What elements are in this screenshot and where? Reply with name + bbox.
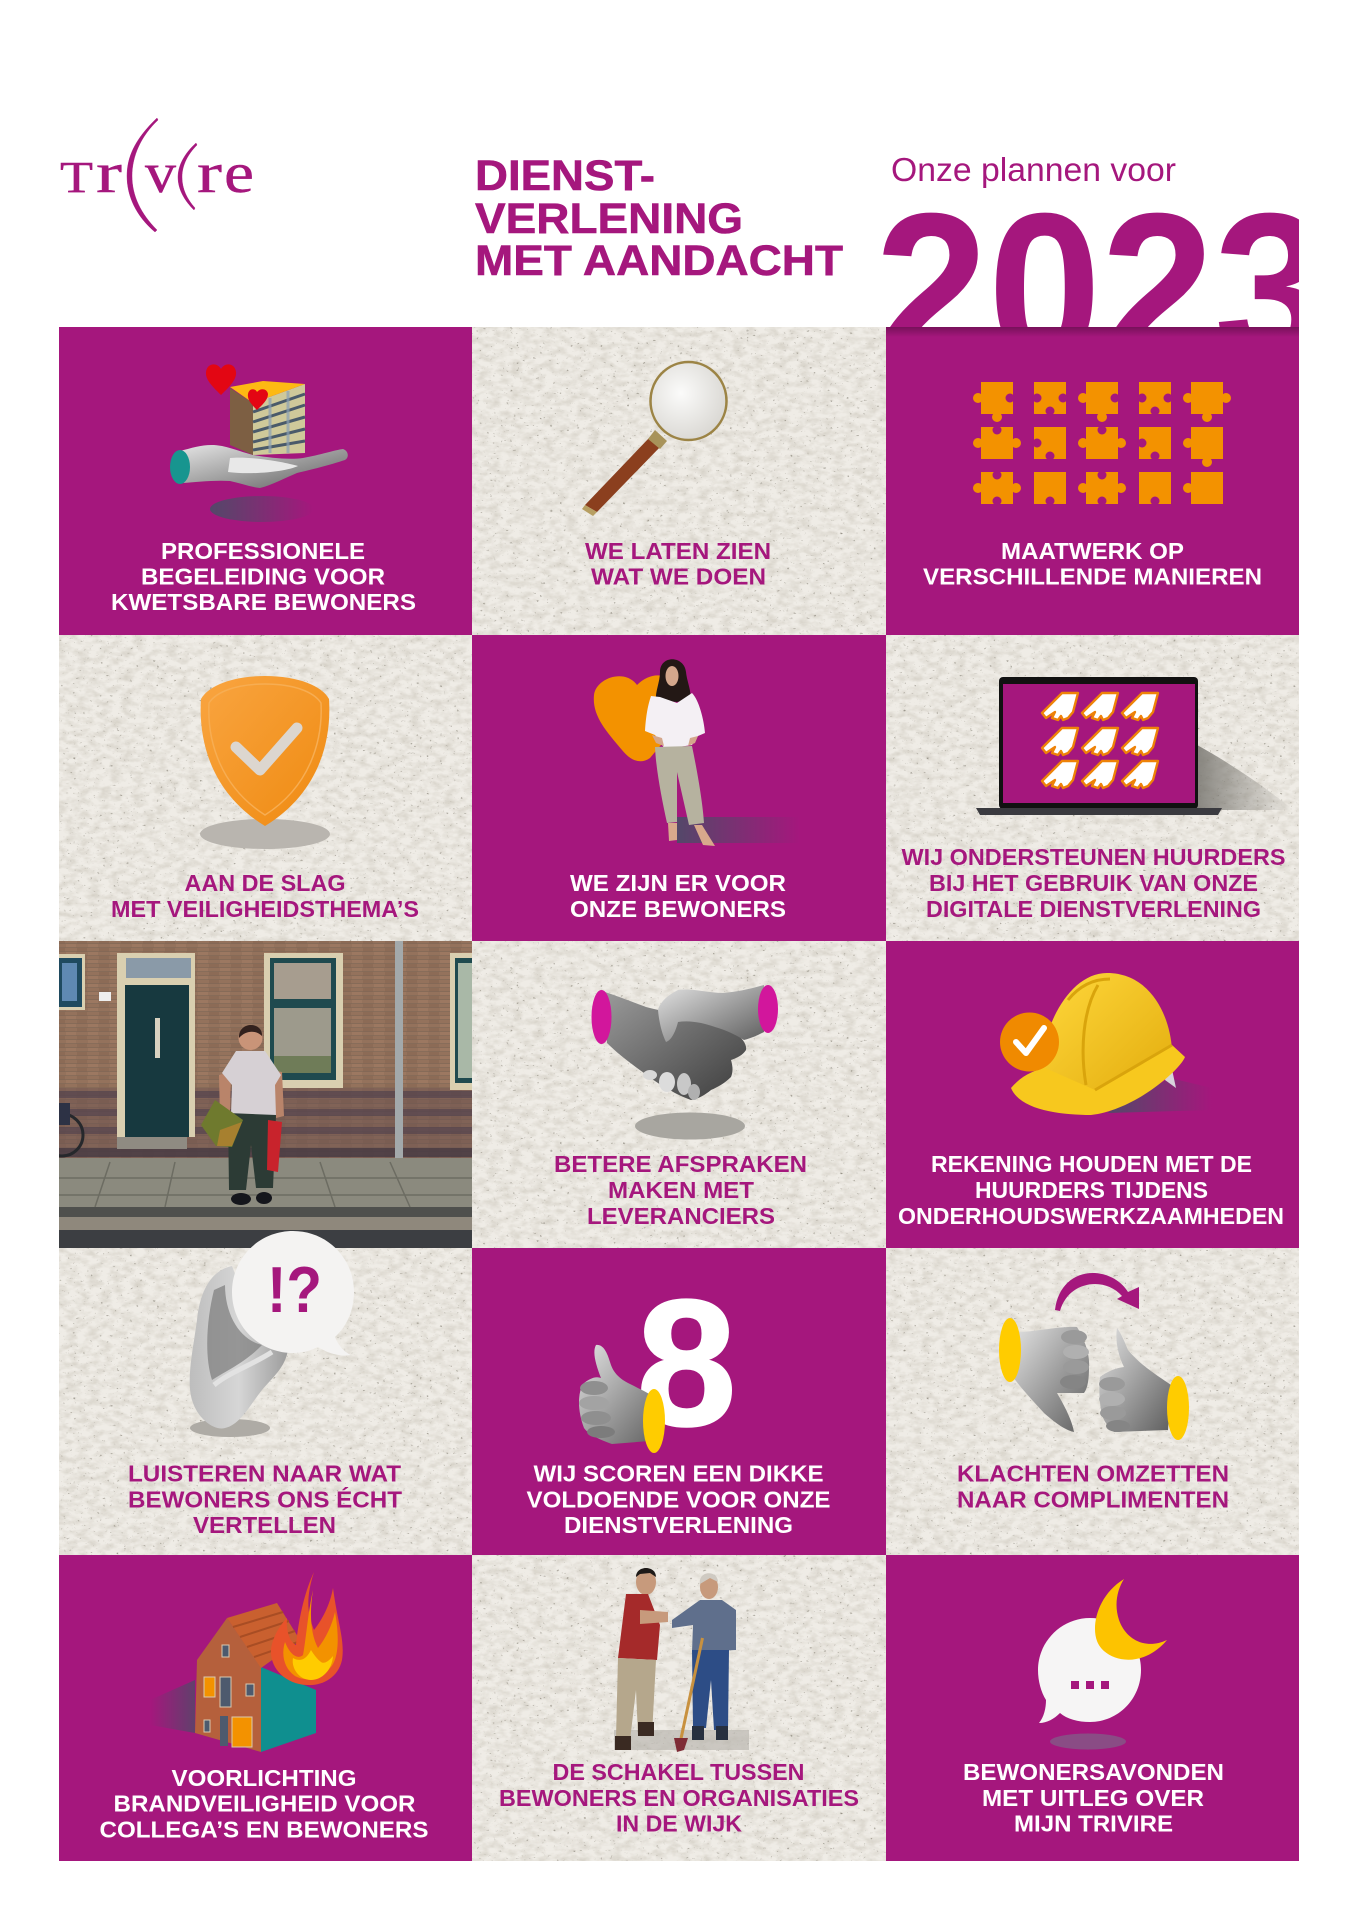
caption: LEVERANCIERS	[587, 1203, 775, 1229]
caption: DIGITALE DIENSTVERLENING	[926, 896, 1261, 922]
icon: woman with orange heart	[594, 659, 800, 846]
icon: speech bubble with moon	[1038, 1579, 1167, 1750]
logo: Trivire: e	[224, 142, 254, 205]
panel: rekening houden met huurders	[886, 941, 1299, 1248]
panel: klachten omzetten	[886, 1248, 1299, 1555]
caption	[923, 538, 1262, 590]
title: Dienstverlening met aandacht	[475, 152, 843, 285]
icon: orange shield with check	[200, 676, 330, 849]
title: Dienstverlening met aandacht: DIENST-	[475, 152, 655, 200]
caption: AAN DE SLAG	[184, 870, 346, 896]
speech bubble	[232, 1231, 354, 1356]
icon: laptop with hand cursors	[976, 677, 1293, 815]
caption: VOLDOENDE VOOR ONZE	[526, 1486, 830, 1512]
caption: PROFESSIONELE	[161, 538, 365, 564]
caption: VOORLICHTING	[172, 1765, 356, 1791]
caption: MET VEILIGHEIDSTHEMA’S	[111, 896, 419, 922]
panel: we zijn er voor onze bewoners	[472, 635, 886, 941]
caption	[554, 1151, 807, 1229]
caption: MAKEN MET	[608, 1177, 754, 1203]
caption: WE ZIJN ER VOOR	[570, 870, 786, 896]
icon: handshake	[592, 985, 778, 1140]
icon: puzzle pieces	[973, 382, 1231, 506]
logo: Trivire	[60, 118, 254, 232]
caption: MAATWERK OP	[1001, 538, 1184, 564]
title: Dienstverlening met aandacht: MET AANDACHT	[475, 237, 843, 285]
caption: BRANDVEILIGHEID VOOR	[114, 1790, 416, 1816]
caption: VERTELLEN	[193, 1512, 336, 1538]
caption	[111, 870, 419, 922]
panel: luisteren naar bewoners	[59, 1231, 472, 1555]
caption: ONZE BEWONERS	[570, 896, 786, 922]
caption: MIJN TRIVIRE	[1014, 1810, 1173, 1836]
caption: VERSCHILLENDE MANIEREN	[923, 564, 1262, 590]
panel: bewonersavonden	[886, 1555, 1299, 1861]
caption: KWETSBARE BEWONERS	[111, 589, 416, 615]
icon: curved arrow	[1055, 1273, 1139, 1311]
caption: COLLEGA’S EN BEWONERS	[100, 1816, 428, 1842]
caption: NAAR COMPLIMENTEN	[957, 1486, 1229, 1512]
caption: HUURDERS TIJDENS	[975, 1177, 1208, 1203]
caption	[526, 1460, 830, 1538]
caption: DIENSTVERLENING	[564, 1512, 793, 1538]
panel: dikke voldoende	[472, 1248, 886, 1555]
caption: LUISTEREN NAAR WAT	[128, 1460, 401, 1486]
caption: IN DE WIJK	[616, 1810, 742, 1836]
caption: BETERE AFSPRAKEN	[554, 1151, 807, 1177]
subtitle: Onze plannen voor: Onze plannen voor	[891, 151, 1176, 188]
panel: veiligheidsthema's	[59, 635, 472, 941]
year 2023: 2023	[875, 169, 1327, 408]
caption: DE SCHAKEL TUSSEN	[552, 1759, 804, 1785]
panel: betere afspraken	[472, 941, 886, 1248]
caption: ONDERHOUDSWERKZAAMHEDEN	[898, 1203, 1284, 1229]
icon: ear with speech bubble	[190, 1231, 354, 1437]
caption: BEGELEIDING VOOR	[141, 564, 385, 590]
caption	[898, 1151, 1284, 1229]
caption	[902, 844, 1286, 922]
panel: we laten zien	[472, 327, 886, 635]
caption	[100, 1765, 428, 1842]
caption	[111, 538, 416, 615]
panel: voorlichting brandveiligheid	[59, 1555, 472, 1861]
icon: magnifying glass	[582, 362, 726, 516]
caption: WIJ SCOREN EEN DIKKE	[534, 1460, 824, 1486]
caption	[499, 1759, 859, 1836]
caption	[963, 1759, 1224, 1836]
logo: Trivire: r	[96, 142, 122, 205]
caption	[570, 870, 786, 922]
caption	[128, 1460, 402, 1538]
caption: KLACHTEN OMZETTEN	[957, 1460, 1229, 1486]
logo: Trivire: T	[60, 153, 93, 202]
icon: ear with speech bubble: !?	[267, 1253, 322, 1326]
caption	[585, 538, 771, 590]
panel: maatwerk	[886, 327, 1299, 635]
caption: BEWONERS ONS ÉCHT	[128, 1486, 402, 1512]
resident	[201, 1025, 284, 1205]
icon: number 8 with thumbs up: 8	[636, 1263, 737, 1464]
caption: WIJ ONDERSTEUNEN HUURDERS	[902, 844, 1286, 870]
icon: thumb down	[999, 1318, 1089, 1432]
logo: Trivire: v	[145, 142, 177, 205]
title: Dienstverlening met aandacht: VERLENING	[475, 195, 743, 243]
caption: BEWONERSAVONDEN	[963, 1759, 1224, 1785]
caption: WE LATEN ZIEN	[585, 538, 771, 564]
caption: BIJ HET GEBRUIK VAN ONZE	[929, 870, 1258, 896]
panel: digitale dienstverlening	[886, 635, 1299, 941]
icon: burning house	[150, 1572, 343, 1752]
icon: two men shaking hands with broom	[614, 1568, 749, 1752]
caption: REKENING HOUDEN MET DE	[931, 1151, 1252, 1177]
icon: yellow helmet with check badge	[1000, 973, 1212, 1115]
caption: WAT WE DOEN	[591, 564, 766, 590]
icon: thumb up	[1099, 1328, 1189, 1440]
logo: Trivire: r	[197, 142, 222, 205]
caption: MET UITLEG OVER	[982, 1785, 1204, 1811]
panel: photo of resident in front of house	[41, 940, 472, 1248]
panel: de schakel	[472, 1555, 886, 1861]
caption	[957, 1460, 1229, 1512]
icon: hand holding building with hearts	[170, 364, 348, 522]
panel: professionele begeleiding	[59, 327, 472, 635]
caption: BEWONERS EN ORGANISATIES	[499, 1785, 859, 1811]
icon: number 8 with thumbs up	[579, 1263, 737, 1464]
